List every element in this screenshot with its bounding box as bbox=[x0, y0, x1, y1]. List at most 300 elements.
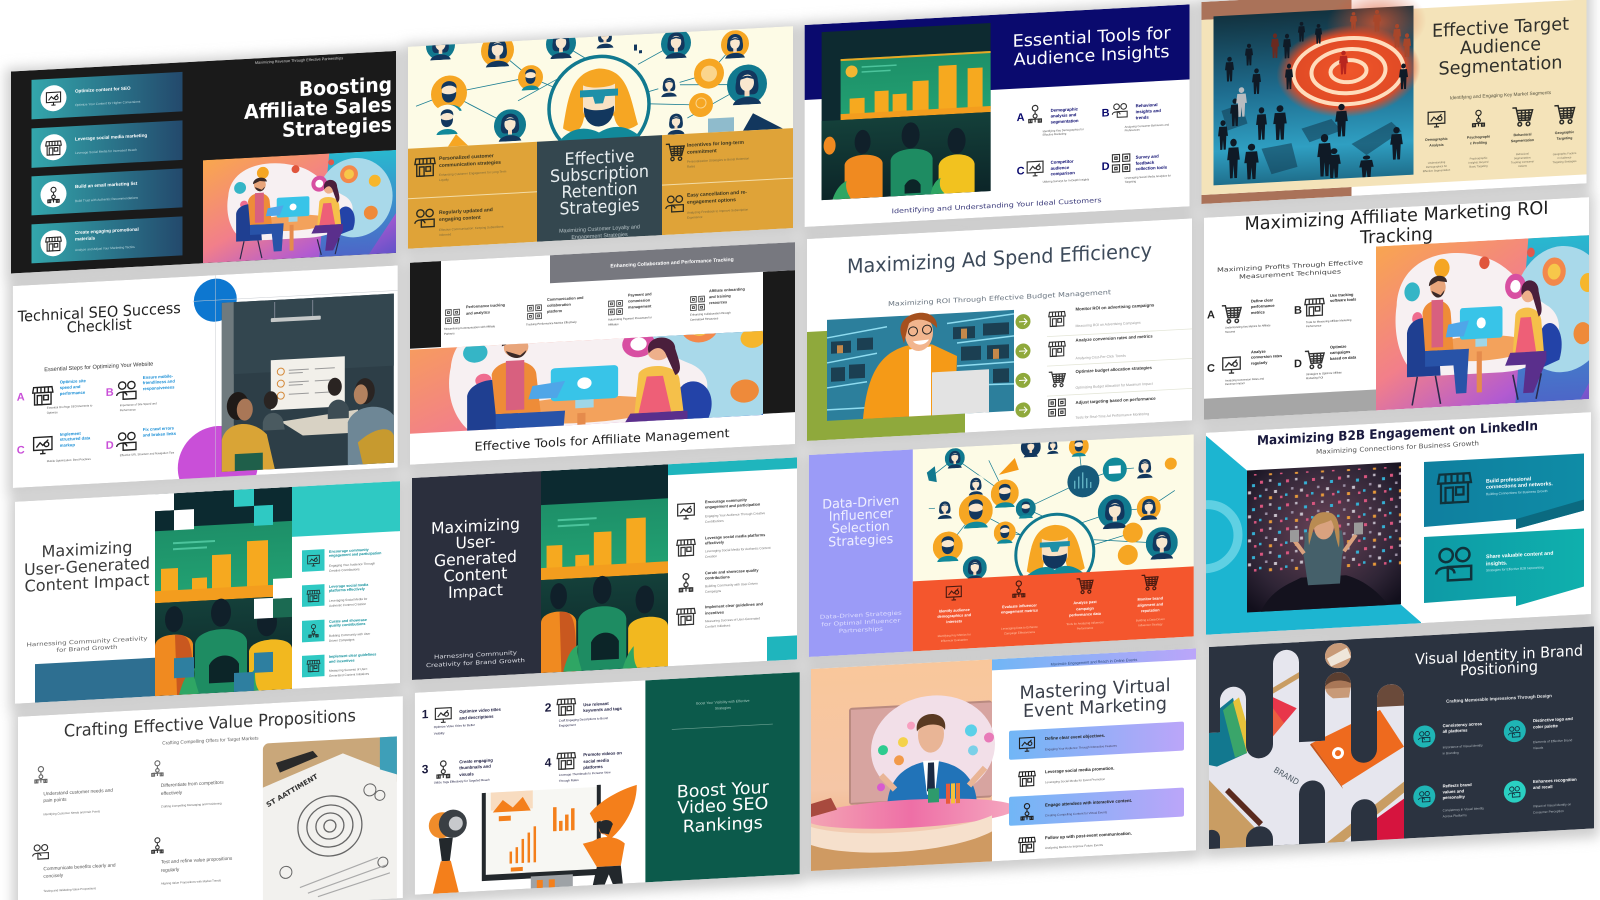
point 2: effectively bbox=[161, 790, 183, 797]
item D: based on data bbox=[1330, 355, 1357, 361]
center title panel bbox=[537, 135, 662, 243]
row 3 bbox=[1016, 365, 1153, 393]
point 4: Aligning Value Propositions with Market Trends bbox=[161, 878, 222, 886]
item 4 bbox=[677, 601, 764, 630]
slide 4: Effective Target Audience Segmentation bbox=[1202, 0, 1586, 204]
item 1: engagement and participation bbox=[705, 502, 761, 510]
step 3: Utilize Tags Effectively for Targeted Reach bbox=[434, 778, 490, 785]
step 3: Engage attendees with interactive content. bbox=[1045, 798, 1132, 807]
step 1 bbox=[32, 72, 182, 119]
item B: Importance of Site Speed and bbox=[120, 401, 157, 407]
step 3: Creating Compelling Content for Virtual Events bbox=[1045, 810, 1108, 817]
red-orange panel: Leveraging Data to Enhance bbox=[1001, 625, 1038, 631]
right panel: Analyzing Feedback to Improve Subscription bbox=[687, 207, 748, 215]
point 1: Understand customer needs and bbox=[43, 788, 113, 797]
title: Crafting Effective Value Propositions bbox=[64, 706, 356, 742]
teal accent block bbox=[292, 481, 400, 537]
item C: C bbox=[1207, 363, 1215, 375]
point 3: Reflects brand bbox=[1443, 782, 1472, 789]
item 1 bbox=[678, 496, 765, 525]
item B: B bbox=[1294, 304, 1302, 317]
point 1: Identifying Customer Needs and Pain Points bbox=[43, 809, 101, 816]
segment descriptions: Actions bbox=[1518, 164, 1528, 168]
left panel: Effective Communication: Keeping Subscribers bbox=[439, 225, 504, 232]
subtitle: Measurement Techniques bbox=[1239, 268, 1341, 281]
item 1: Engaging Your Audience Through Creative bbox=[705, 511, 765, 518]
item 3: Driven Campaigns bbox=[329, 638, 355, 643]
red-orange panel: reputation bbox=[1141, 608, 1160, 613]
step 1: Optimize content for SEO bbox=[75, 86, 131, 94]
segment descriptions: Geographic Factors bbox=[1553, 151, 1577, 156]
illustration: affiliates at computer bbox=[200, 150, 399, 263]
step 3: visuals bbox=[459, 771, 474, 777]
tool 2: platform bbox=[547, 309, 563, 314]
point 2: Crafting Compelling Messaging and Positioning bbox=[161, 801, 222, 809]
segment descriptions: Psychographic bbox=[1470, 156, 1488, 161]
item 1: Creative Contributions bbox=[329, 567, 360, 573]
item 1: Engaging Your Audience Through bbox=[329, 561, 375, 568]
point 4: Consumer Perception bbox=[1533, 809, 1564, 815]
item 3: contributions bbox=[705, 574, 730, 581]
point 3: values and bbox=[1443, 788, 1465, 795]
item B: responsiveness bbox=[143, 385, 175, 391]
title: Strategies bbox=[282, 112, 392, 142]
item 1 bbox=[302, 546, 382, 574]
step 1: and descriptions bbox=[459, 714, 494, 721]
item 3 bbox=[679, 567, 759, 595]
illustration: affiliates at computer bbox=[410, 330, 763, 434]
point 1: Importance of Visual Identity bbox=[1443, 743, 1483, 750]
title: Audience Insights bbox=[1014, 42, 1170, 70]
lavender title panel: Selection bbox=[832, 519, 890, 537]
left panel: Regularly updated and bbox=[439, 207, 493, 216]
step 4: Follow up with post-event communication. bbox=[1045, 831, 1132, 840]
lavender title panel: Data-Driven Strategies bbox=[820, 611, 902, 621]
item D: Fix crawl errors bbox=[143, 425, 175, 432]
subtitle: Maximizing Profits Through Effective bbox=[1217, 259, 1363, 274]
lavender title panel: Strategies bbox=[828, 532, 894, 550]
red-orange panel: engagement metrics bbox=[1001, 609, 1038, 615]
photo: crowd around target bbox=[1214, 0, 1426, 185]
item B bbox=[106, 373, 175, 413]
item B: Tools for Measuring Affiliate Marketing bbox=[1306, 318, 1352, 324]
step 1: Visibility bbox=[434, 731, 445, 736]
left panel: engaging content bbox=[439, 215, 481, 223]
point 4: regularly bbox=[161, 867, 180, 874]
item A: segmentation bbox=[1051, 118, 1079, 125]
step 4: Analyze and Adjust Your Marketing Tactics bbox=[75, 245, 135, 252]
center title panel: Effective bbox=[564, 146, 634, 170]
step 3: thumbnails and bbox=[459, 764, 491, 770]
point 1: pain points bbox=[43, 797, 67, 804]
item B: Performance bbox=[120, 407, 136, 412]
center title panel: Engagement Strategies bbox=[571, 232, 628, 241]
red-orange panel: Performance bbox=[1077, 626, 1094, 631]
red-orange panel: Campaign Effectiveness bbox=[1004, 630, 1036, 636]
dark title panel: User- bbox=[456, 532, 496, 553]
step 4 bbox=[32, 216, 182, 263]
item A: speed and bbox=[60, 384, 81, 390]
title: User-Generated bbox=[24, 553, 150, 579]
point 1: all platforms bbox=[1443, 728, 1468, 734]
segment descriptions: Behavioral bbox=[1516, 151, 1529, 156]
item 2: Authentic Content Creation bbox=[329, 602, 366, 608]
title: Affiliate Sales bbox=[244, 92, 392, 124]
item 2: Leveraging Social Media for bbox=[329, 597, 367, 603]
item D: D bbox=[1102, 161, 1110, 173]
step 4: Promote videos on bbox=[583, 750, 622, 757]
item 3: Building Community with User-Driven bbox=[705, 581, 758, 588]
step 2: Leveraging Social Media for Event Promotion bbox=[1045, 777, 1105, 784]
slide 12: Maximizing B2B Engagement on LinkedIn bbox=[1174, 412, 1591, 636]
item C: Analyze bbox=[1251, 349, 1267, 354]
item 4: Measuring Success of User-Generated bbox=[705, 616, 760, 623]
title: Segmentation bbox=[1439, 52, 1563, 80]
item A: analysis and bbox=[1051, 112, 1077, 119]
callout: valuable content bbox=[1424, 528, 1584, 611]
tool 4 bbox=[690, 287, 746, 322]
point 3: Communicate benefits clearly and bbox=[43, 862, 116, 872]
item 2 bbox=[677, 532, 771, 560]
lavender title panel bbox=[809, 449, 913, 657]
title: Essential Tools for bbox=[1013, 23, 1171, 52]
callout: professional connections: Build professional bbox=[1486, 476, 1532, 485]
item C: structured data bbox=[60, 435, 91, 442]
right panel: Easy cancellation and re- bbox=[687, 190, 747, 199]
item 4: incentives bbox=[705, 610, 724, 616]
title bbox=[18, 304, 180, 332]
item D: Optimize bbox=[1330, 344, 1347, 350]
title: Audience bbox=[1460, 34, 1541, 59]
tool 2: collaboration bbox=[547, 303, 572, 308]
left panel: Loyalty bbox=[439, 177, 449, 182]
step 2: keywords and tags bbox=[583, 706, 622, 713]
point 2 bbox=[152, 757, 224, 809]
illustration: shopper in store bbox=[827, 308, 1014, 421]
item A: A bbox=[1017, 112, 1025, 124]
tool 3: management bbox=[628, 304, 652, 310]
grey accent block bbox=[1204, 389, 1376, 420]
point 2: Distinctive logo and bbox=[1533, 716, 1573, 723]
segment descriptions: Demographics for bbox=[1426, 164, 1447, 169]
tool 1: Partners bbox=[444, 331, 455, 336]
green title panel: Rankings bbox=[683, 813, 763, 837]
item 1: Contributions bbox=[705, 519, 724, 524]
point 3: concisely bbox=[43, 873, 64, 880]
segment labels bbox=[1425, 130, 1574, 148]
item A: Define clear bbox=[1251, 297, 1274, 303]
step 2: Engagement bbox=[559, 723, 576, 728]
point 2: Differentiate from competitors bbox=[161, 780, 224, 789]
segment descriptions: Tracking Consumer bbox=[1511, 159, 1534, 164]
item C: C bbox=[17, 444, 25, 457]
item A bbox=[1016, 104, 1084, 136]
step 1 bbox=[1009, 722, 1184, 760]
photo: brand stationery seen through pill cut-outs: BRAND bbox=[1272, 765, 1301, 787]
step 2: Leverage social media marketing bbox=[75, 133, 147, 142]
illustration: audience with chart and checker squares bbox=[155, 487, 292, 696]
step 3: 3 bbox=[422, 762, 429, 776]
cyan angled shape bbox=[1174, 424, 1421, 636]
title: Effective Target bbox=[1432, 14, 1569, 42]
row 2: Analyzing Cost-Per-Click Trends bbox=[1076, 354, 1126, 360]
step 4: platforms bbox=[583, 764, 603, 770]
right panel: Rates bbox=[687, 164, 696, 169]
point 1: Consistency across bbox=[1443, 721, 1483, 728]
point 2: Visuals bbox=[1533, 746, 1544, 750]
tool 1: Streamlining Communication with Affiliate bbox=[444, 324, 496, 331]
segment labels: Behavioral bbox=[1514, 132, 1531, 137]
point 4 bbox=[152, 834, 233, 886]
row 4: Tools for Real-Time Ad Performance Monitoring bbox=[1076, 412, 1149, 420]
item B: Ensure mobile- bbox=[143, 373, 174, 380]
item 2: Leverage social media bbox=[329, 583, 369, 589]
point 4: Enhances recognition bbox=[1533, 777, 1577, 784]
subtitle: Identifying and Understanding Your Ideal Customers bbox=[892, 196, 1102, 215]
red-orange panel: Evaluate influencer bbox=[1002, 603, 1037, 609]
center title panel: Strategies bbox=[560, 195, 640, 220]
photo: speaker at virtual event bbox=[806, 658, 1016, 871]
item D: Survey and bbox=[1136, 154, 1159, 160]
title: Maximizing bbox=[42, 537, 133, 561]
callout: valuable content: Strategies for Effective B2B Networking bbox=[1486, 565, 1544, 573]
item C bbox=[1017, 160, 1089, 183]
lavender title panel: Data-Driven bbox=[822, 494, 899, 513]
item C: Mobile Optimization: Best Practices bbox=[47, 457, 91, 463]
tool 2 bbox=[526, 296, 584, 326]
item D: collection tools bbox=[1136, 165, 1168, 171]
step 4: Create engaging promotional bbox=[75, 227, 139, 235]
subtitle: Maximizing Connections for Business Growth bbox=[1316, 439, 1479, 456]
item D bbox=[106, 425, 177, 458]
red-orange panel: Influencer Evaluation bbox=[941, 637, 968, 643]
item D: Effective URL Structure and Navigation Tips bbox=[120, 450, 175, 457]
illustration: influencer network bbox=[927, 429, 1178, 599]
point 3: Across Platforms bbox=[1443, 813, 1467, 819]
step 4 bbox=[1019, 831, 1132, 852]
segment descriptions: Targeting Strategies bbox=[1553, 159, 1577, 164]
segment labels: Analysis bbox=[1429, 143, 1444, 148]
left panel: Informed bbox=[439, 232, 451, 237]
step 2: Craft Engaging Descriptions to Boost bbox=[559, 716, 608, 723]
step 4: Through Rates bbox=[559, 778, 579, 783]
slide 16: Visual Identity in Brand Positioning bbox=[1203, 606, 1594, 880]
item C: Revenue Impact bbox=[1225, 381, 1245, 386]
point 2 bbox=[1504, 716, 1573, 752]
point 3: Consistency in Visual Identity bbox=[1443, 806, 1484, 813]
step 1 bbox=[422, 703, 502, 736]
left panel: communication strategies bbox=[439, 160, 501, 169]
red-orange panel: Analyze past bbox=[1073, 600, 1097, 605]
tool 3: Affiliates bbox=[608, 322, 619, 327]
item 3: Campaigns bbox=[705, 589, 722, 594]
red-orange panel: Building a Data-Driven bbox=[1136, 617, 1165, 623]
title: Maximizing Affiliate Marketing ROI bbox=[1244, 198, 1548, 235]
tool 3: Automating Payment Processes for bbox=[608, 315, 652, 322]
item C: Analyzing Conversion Rates and bbox=[1225, 376, 1264, 383]
step 2: Leverage Social Media for Increased Reach bbox=[75, 148, 137, 155]
segment labels: Targeting bbox=[1557, 136, 1572, 141]
title: Effective Tools for Affiliate Management bbox=[475, 426, 730, 454]
callout: valuable content: insights. bbox=[1486, 560, 1508, 568]
center title panel: Maximizing Customer Loyalty and bbox=[559, 224, 640, 235]
item B: software tools bbox=[1330, 297, 1356, 303]
title: Mastering Virtual bbox=[1019, 675, 1170, 704]
slide 13: Crafting Effective Value Propositions bbox=[18, 696, 403, 900]
item D bbox=[1102, 152, 1171, 185]
left panel bbox=[408, 142, 537, 249]
subtitle: Maximizing ROI Through Effective Budget Management bbox=[888, 288, 1112, 308]
tool 3: Payment and bbox=[628, 292, 652, 298]
point 4: Impact of Visual Identity on bbox=[1533, 802, 1571, 808]
point 3: personality bbox=[1443, 794, 1466, 800]
segment descriptions: in Audience bbox=[1558, 155, 1572, 160]
item 4: Generated Content Initiatives bbox=[329, 672, 369, 678]
item A: Identifying Key Demographics for bbox=[1043, 127, 1084, 133]
item 3: Curate and showcase bbox=[329, 618, 367, 624]
central portrait bbox=[1016, 512, 1094, 594]
lavender title panel: for Optimal Influencer bbox=[821, 618, 901, 628]
segment descriptions bbox=[1422, 152, 1576, 172]
item D: D bbox=[1294, 358, 1302, 370]
subtitle: Identifying and Engaging Key Market Segments bbox=[1450, 90, 1552, 101]
illustration: audience with chart bbox=[541, 464, 668, 673]
segment descriptions: Segmentation: bbox=[1514, 155, 1531, 160]
title: Maximizing Ad Spend Efficiency bbox=[847, 238, 1152, 278]
title bbox=[1014, 26, 1171, 66]
tool 4: resources bbox=[709, 300, 727, 305]
tool 1: and analytics bbox=[466, 310, 490, 316]
item 4 bbox=[302, 652, 376, 679]
row 2: Analyze conversion rates and metrics bbox=[1076, 333, 1153, 343]
red-orange panel: alignment and bbox=[1137, 602, 1164, 608]
left panel: Enhancing Customer Engagement for Long-Term bbox=[439, 169, 507, 177]
item 2: Leverage social media platforms bbox=[705, 532, 765, 540]
item D: Strategies to Optimize Affiliate bbox=[1306, 370, 1342, 376]
point 1 bbox=[1413, 721, 1483, 757]
row 1: Measuring ROI on Advertising Campaigns bbox=[1076, 321, 1141, 328]
item D: Marketing ROI bbox=[1306, 375, 1324, 380]
segment icons bbox=[1428, 104, 1576, 128]
subtitle: for Brand Growth bbox=[56, 645, 118, 654]
subtitle: Crafting Compelling Offers for Target Markets bbox=[162, 735, 259, 747]
tool 1: Performance tracking bbox=[466, 303, 506, 309]
item B: Performance bbox=[1306, 323, 1322, 328]
slide 8: Maximizing Affiliate Marketing ROI Tracking bbox=[1204, 194, 1600, 420]
step 1: Engaging Your Audience Through Interactive Features bbox=[1045, 744, 1117, 751]
item 2: platforms effectively bbox=[329, 587, 366, 593]
item B: insights and bbox=[1136, 108, 1161, 114]
item B: B bbox=[1102, 107, 1110, 120]
blue circle bbox=[194, 278, 237, 323]
step 4 bbox=[545, 750, 622, 784]
title: Checklist bbox=[67, 315, 132, 337]
dark title panel: Maximizing bbox=[431, 514, 520, 538]
item 4: and incentives bbox=[329, 659, 355, 664]
cream panel bbox=[1202, 0, 1586, 195]
red-orange panel: Tools for Analyzing Influencer bbox=[1066, 620, 1104, 626]
step 2 bbox=[1019, 766, 1114, 786]
item D: feedback bbox=[1136, 160, 1155, 166]
slide 10: Maximizing User-Generated Content Impact (dark) bbox=[412, 457, 797, 680]
item A: Effective Marketing bbox=[1043, 131, 1067, 137]
red-orange panel: performance data bbox=[1069, 612, 1102, 617]
step 4: Analyzing Metrics to Improve Future Events bbox=[1045, 843, 1103, 850]
step 1: 1 bbox=[422, 707, 429, 721]
tool 1 bbox=[444, 303, 506, 336]
center title panel: Retention bbox=[562, 179, 638, 203]
standing figures bbox=[1218, 16, 1408, 185]
segment labels: c Profiling bbox=[1470, 141, 1487, 145]
dark title panel: Content bbox=[444, 563, 508, 586]
item C: Utilizing Surveys for In-Depth Insights bbox=[1043, 177, 1090, 184]
item C: audience bbox=[1051, 165, 1070, 171]
green title panel: Video SEO bbox=[677, 794, 768, 819]
item 4: Implement clear guidelines bbox=[329, 652, 376, 659]
slide 3: Essential Tools for Audience Insights bbox=[805, 4, 1190, 227]
photo: team meeting bbox=[222, 294, 394, 472]
point 4: and recall bbox=[1533, 784, 1553, 790]
row 4 bbox=[1016, 394, 1156, 423]
tool 2: Tracking Performance Metrics Effectively bbox=[526, 320, 577, 326]
slide 15: Mastering Virtual Event Marketing bbox=[806, 648, 1196, 871]
subtitle: Essential Steps for Optimizing Your Website bbox=[44, 361, 153, 373]
subtitle: Crafting Memorable Impressions Through Design bbox=[1446, 693, 1552, 704]
slide 5: Technical SEO Success Checklist bbox=[13, 266, 398, 488]
segment descriptions: Effective Segmentation bbox=[1423, 168, 1451, 173]
right panel: commitment bbox=[687, 148, 717, 156]
step 3: Create engaging bbox=[459, 758, 493, 764]
red-orange panel: Identify audience bbox=[939, 608, 970, 614]
step 4: Leverage Thumbnails to Increase View bbox=[559, 770, 611, 777]
segment labels: Demographic bbox=[1425, 137, 1448, 142]
illustration: people network bbox=[416, 30, 783, 146]
item B: Preferences bbox=[1125, 128, 1140, 132]
step 3 bbox=[32, 168, 182, 215]
item 3 bbox=[302, 617, 370, 644]
title bbox=[244, 77, 392, 138]
title: Event Marketing bbox=[1023, 693, 1167, 722]
purple circle bbox=[178, 426, 258, 480]
photo: strategy sketch on desk: ST AATTIMENT bbox=[265, 773, 320, 809]
right panel: Experience bbox=[687, 215, 703, 220]
item D bbox=[1294, 343, 1357, 381]
dark title panel: Generated bbox=[434, 547, 517, 570]
grey header band bbox=[550, 242, 795, 283]
brown accent bands bbox=[1202, 0, 1352, 204]
item A: Optimize bbox=[47, 410, 58, 415]
callout: professional connections: connections and networks. bbox=[1486, 481, 1553, 491]
step 4: social media bbox=[583, 758, 610, 764]
title bbox=[1434, 17, 1569, 78]
item D: Leveraging Social Media Analytics for bbox=[1125, 173, 1171, 180]
slide 6: Effective Tools for Affiliate Management bbox=[394, 242, 802, 479]
item C: conversion rates bbox=[1251, 353, 1282, 360]
point 1 bbox=[35, 763, 113, 817]
illustration: video SEO workshop bbox=[429, 783, 637, 894]
lavender title panel: Influencer bbox=[829, 506, 893, 525]
dark title panel: Creativity for Brand Growth bbox=[426, 658, 526, 669]
teal accents bbox=[668, 457, 797, 666]
segment descriptions: Understanding bbox=[1428, 160, 1446, 165]
item A: Understanding Key Metrics for Affiliate bbox=[1225, 323, 1271, 330]
step 1: Optimize Your Content for Higher Conversions bbox=[75, 100, 141, 107]
title: Tracking bbox=[1359, 224, 1433, 249]
title: Visual Identity in Brand bbox=[1415, 642, 1583, 668]
point 1: in Branding bbox=[1443, 751, 1459, 756]
step 2: 2 bbox=[545, 700, 552, 715]
row 4: Adjust targeting based on performance bbox=[1076, 396, 1156, 405]
